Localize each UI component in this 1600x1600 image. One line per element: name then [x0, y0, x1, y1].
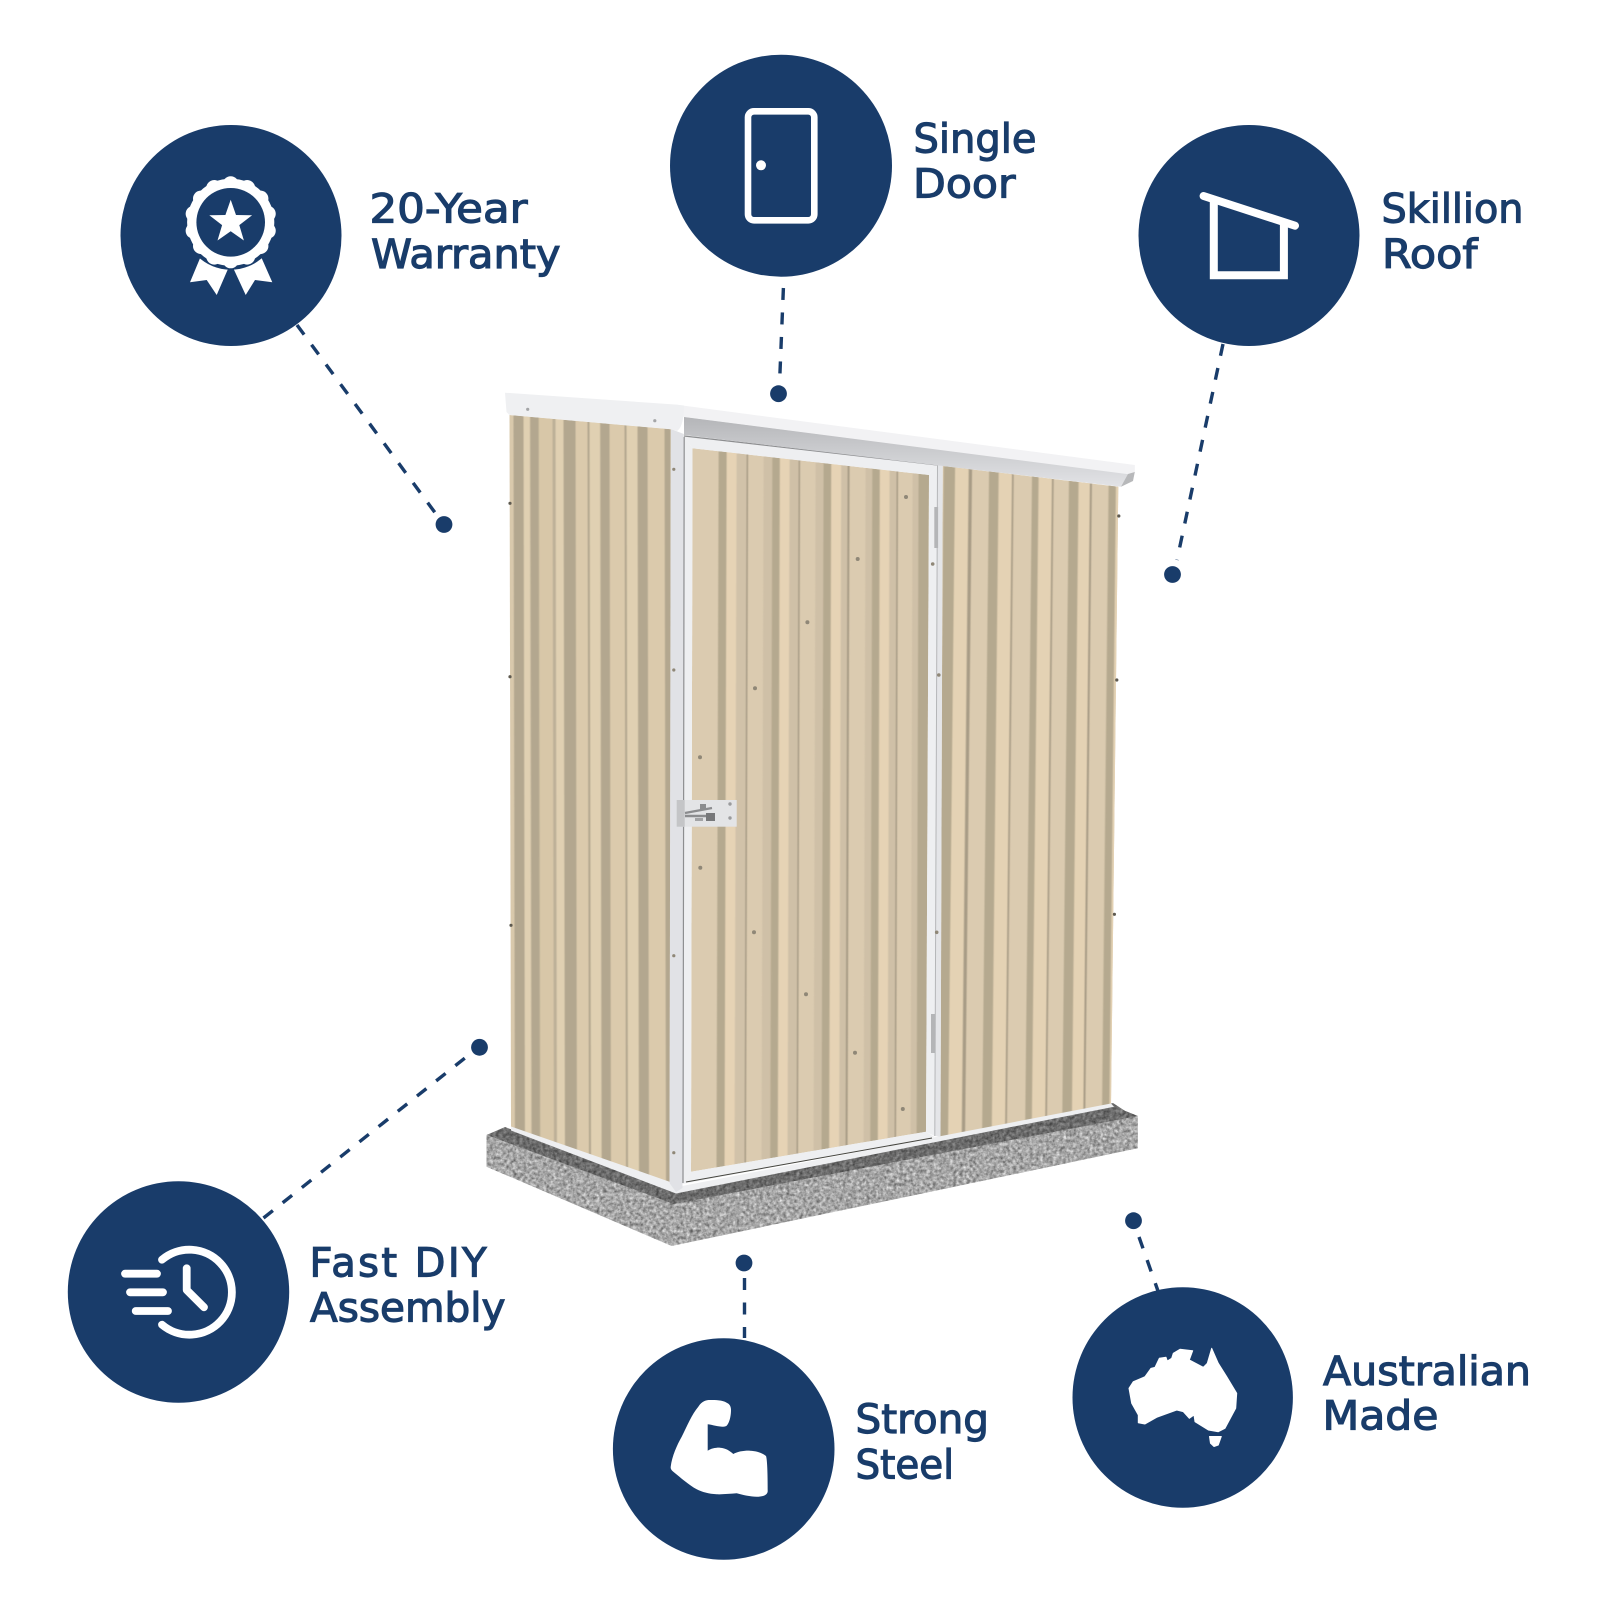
- label: Strong Steel: [856, 1397, 989, 1488]
- badge circle: australian: [1072, 1287, 1293, 1508]
- roof underside: [684, 417, 1130, 487]
- badge circle: steel: [613, 1338, 834, 1560]
- feature: fast DIY assembly: [68, 1181, 506, 1403]
- label: Fast DIY Assembly: Fast DIY: [310, 1241, 487, 1287]
- shed illustration: [480, 393, 1145, 1255]
- label: 20-Year Warranty: 20-Year: [370, 187, 528, 233]
- roof gutter end: [1121, 472, 1135, 487]
- roof side cap: [505, 393, 684, 431]
- corner post: [670, 429, 684, 1192]
- label: Skillion Roof: Skillion: [1382, 187, 1524, 233]
- connector: australian made: [1125, 1212, 1158, 1291]
- label: Skillion Roof: Roof: [1382, 232, 1478, 278]
- connector: fast assembly: [264, 1039, 488, 1218]
- base trim: [511, 1104, 1114, 1194]
- label: Australian Made: [1322, 1349, 1531, 1439]
- icon: fast clock: [125, 1250, 232, 1335]
- icon: award rosette: [183, 175, 278, 295]
- badge circle: roof: [1138, 125, 1360, 346]
- badge circle: assembly: [68, 1181, 289, 1403]
- badge circle: warranty: [120, 125, 342, 346]
- label: Australian Made: Australian: [1323, 1349, 1531, 1395]
- badge circle: door: [670, 55, 892, 277]
- slab top shadow band: [486, 1103, 1138, 1204]
- connector: skillion roof: [1164, 344, 1223, 583]
- label: Fast DIY Assembly: [310, 1241, 506, 1332]
- label: Skillion Roof: [1382, 187, 1524, 278]
- concrete slab: [486, 1110, 1138, 1246]
- screws: [508, 408, 1120, 1154]
- feature: australian made: [1072, 1287, 1531, 1508]
- feature: single door: [670, 55, 1036, 277]
- hinges: [931, 507, 938, 1053]
- right wall cladding: [940, 466, 1118, 1136]
- connector: warranty: [297, 325, 452, 533]
- door frame: [682, 436, 943, 1184]
- label: Single Door: [913, 117, 1036, 207]
- icon: skillion shed: [1204, 196, 1295, 275]
- label: Single Door: Single: [914, 117, 1036, 163]
- icon: map of Australia: [1129, 1348, 1237, 1446]
- label: Fast DIY Assembly: Assembly: [310, 1286, 506, 1332]
- left wall cladding: [510, 415, 671, 1182]
- feature: 20-year warranty: [120, 125, 560, 346]
- connector: single door: [770, 288, 787, 402]
- icon: flexed arm: [671, 1400, 768, 1497]
- feature: skillion roof: [1138, 125, 1524, 346]
- icon: door: [748, 111, 814, 220]
- label: 20-Year Warranty: [370, 187, 560, 278]
- label: 20-Year Warranty: Warranty: [371, 232, 560, 278]
- label: Single Door: Door: [913, 161, 1016, 207]
- latch: [677, 800, 737, 827]
- label: Strong Steel: Steel: [856, 1442, 954, 1488]
- feature: strong steel: [613, 1338, 989, 1560]
- label: Strong Steel: Strong: [856, 1397, 989, 1443]
- door cladding: [691, 448, 929, 1172]
- roof top flashing: [672, 404, 1135, 474]
- connector: strong steel: [736, 1255, 752, 1338]
- label: Australian Made: Made: [1322, 1393, 1438, 1439]
